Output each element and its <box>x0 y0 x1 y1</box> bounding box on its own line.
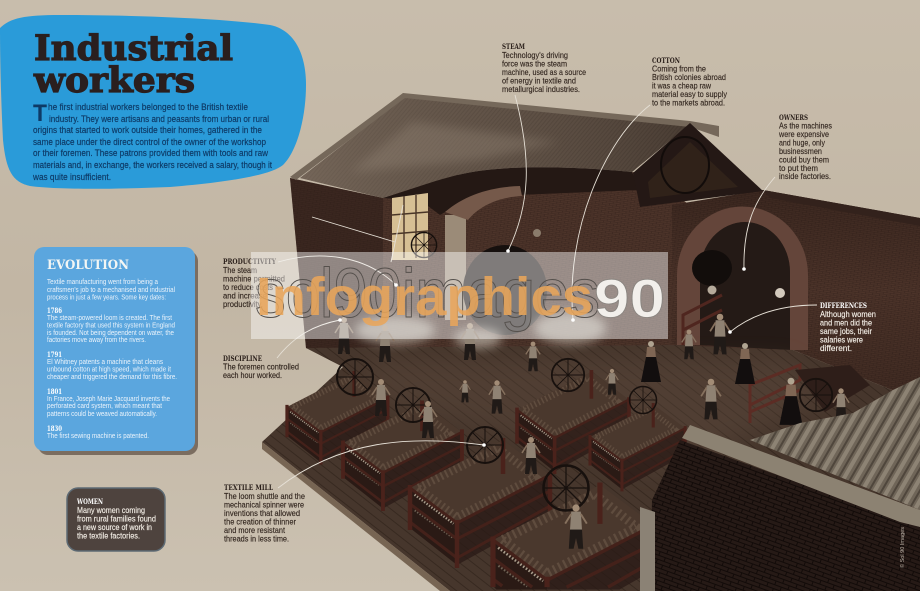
title <box>33 28 233 101</box>
gable <box>633 123 763 207</box>
callout: differences: DIFFERENCES <box>820 301 867 310</box>
illustration: textile mill building <box>262 93 920 591</box>
panel: women: a new source of work in <box>77 522 152 532</box>
callout: productivity <box>223 257 285 309</box>
callout: owners <box>778 113 832 181</box>
callout: textile mill <box>224 483 305 544</box>
callout: owners: OWNERS <box>779 113 808 122</box>
date: 1830: The first sewing machine is patented. <box>47 433 149 440</box>
date: 1830: 1830 <box>47 424 62 433</box>
panel: women: from rural families found <box>77 514 156 524</box>
date: 1791: 1791 <box>47 350 62 359</box>
date: 1786: The steam-powered loom is created. The first <box>47 315 172 322</box>
callout: cotton: COTTON <box>652 56 680 65</box>
leader lines with dots <box>277 95 817 488</box>
evolution intro: Textile manufacturing went from being a <box>47 279 158 286</box>
callout: cotton: to the markets abroad. <box>652 98 725 108</box>
intro panel: blue blob <box>0 15 306 189</box>
callout: owners: businessmen <box>779 146 822 156</box>
lower right corrugated roof <box>750 377 920 510</box>
callout: steam: Technology's driving <box>502 50 568 60</box>
callout: owners: could buy them <box>779 154 829 164</box>
callout: textile mill: the creation of thinner <box>224 516 296 526</box>
main roof <box>300 97 690 198</box>
callout: productivity: PRODUCTIVITY <box>223 257 276 266</box>
callout: discipline: each hour worked. <box>223 370 282 380</box>
lower right brick building <box>650 440 920 591</box>
date: 1801: In France, Joseph Marie Jacquard invents the <box>47 396 170 403</box>
callout: owners: to put them <box>779 163 818 173</box>
right wall with arch <box>672 190 920 392</box>
date: 1786: textile factory that used this system in England <box>47 322 175 330</box>
callout: cotton: material easy to supply <box>652 89 728 99</box>
date: 1786: factories move away from the rivers. <box>47 337 146 344</box>
callout: discipline <box>223 354 299 380</box>
panel: women: the textile factories. <box>77 530 140 540</box>
copyright: © Sol 90 Images <box>899 526 906 568</box>
callout: textile mill: inventions that allowed <box>224 508 300 518</box>
callout: steam: STEAM <box>502 42 525 51</box>
floor <box>262 345 920 591</box>
callout: textile mill: and more resistant <box>224 525 286 535</box>
date: 1791: cheaper and triggered the demand for this fibre. <box>47 374 177 381</box>
date: 1801 <box>47 387 170 418</box>
callout: steam: of energy in textile and <box>502 76 576 86</box>
date: 1801: perforated card system, which meant that <box>47 403 162 410</box>
callout: steam <box>502 42 586 94</box>
arch <box>677 206 808 350</box>
intro text: was quite insufficient. <box>32 172 111 183</box>
date: 1801: patterns could be weaved automatically. <box>47 411 157 418</box>
evolution heading: EVOLUTION <box>47 258 129 273</box>
watermark: 90 <box>594 269 665 329</box>
evolution intro: craftsmen's job to a mechanised and industrial <box>47 287 175 294</box>
callout: productivity: The steam <box>223 265 257 275</box>
title: Industrial <box>34 28 233 69</box>
evolution intro <box>47 279 175 302</box>
date: 1786: is founded. Not being dependent on water, the <box>47 330 174 337</box>
callout: steam: metallurgical industries. <box>502 84 580 94</box>
callout: discipline: DISCIPLINE <box>223 354 262 363</box>
callout: cotton: it was a cheap raw <box>652 80 712 90</box>
intro text: industry. They were artisans and peasants from urban or rural <box>49 114 269 125</box>
callout: textile mill: mechanical spinner were <box>224 500 304 510</box>
window <box>392 193 428 260</box>
evolution intro: process in just a few years. Some key dates: <box>47 294 166 302</box>
callout: steam: force was the steam <box>502 58 567 68</box>
intro text: or their foremen. These patrons provided them with tools and raw <box>33 148 268 159</box>
intro text: T <box>33 100 47 127</box>
callout: steam: machine, used as a source <box>502 67 586 77</box>
date: 1786 <box>47 306 175 344</box>
panel: evolution <box>34 247 198 455</box>
intro text: origins that started to work outside their homes, gathered in the <box>33 125 262 136</box>
panel: women: Many women coming <box>77 505 145 515</box>
callout: differences <box>820 301 876 353</box>
looms <box>287 295 870 589</box>
panel: women <box>67 488 165 551</box>
intro text: same place under the direct control of the owner of the workshop <box>33 137 266 148</box>
stone ledge <box>682 425 920 527</box>
callout: productivity: and increase <box>223 290 267 300</box>
date: 1830 <box>47 424 149 440</box>
callout: cotton: British colonies abroad <box>652 72 726 82</box>
intro text: he first industrial workers belonged to the British textile <box>48 102 248 113</box>
callout: differences: different. <box>820 343 852 353</box>
steam clouds <box>355 312 606 348</box>
back wall <box>340 172 690 350</box>
callout: cotton: Coming from the <box>652 64 706 74</box>
watermark: Infographics <box>256 267 593 327</box>
panel: women: WOMEN <box>76 497 103 506</box>
date: 1786: 1786 <box>47 306 62 315</box>
intro text <box>32 100 272 183</box>
workers <box>335 286 849 549</box>
date: 1791 <box>47 350 177 381</box>
callout: differences: salaries were <box>820 334 863 344</box>
callout: differences: same jobs, their <box>820 326 872 336</box>
callout: owners: As the machines <box>779 120 832 130</box>
callout: discipline: The foremen controlled <box>223 362 299 372</box>
date: 1791: unbound cotton at high speed, which made it <box>47 366 171 374</box>
callout: textile mill: The loom shuttle and the <box>224 491 305 501</box>
callout: textile mill: threads in less time. <box>224 534 289 544</box>
callout: owners: inside factories. <box>779 171 831 181</box>
callout: owners: and huge, only <box>779 138 826 148</box>
callout: productivity: to reduce costs <box>223 282 273 292</box>
callout: differences: Although women <box>820 309 876 319</box>
loom wheels <box>337 359 832 510</box>
left wall <box>290 178 383 365</box>
callout: owners: were expensive <box>778 129 829 139</box>
callout: differences: and men did the <box>820 318 872 328</box>
callout: textile mill: TEXTILE MILL <box>224 483 274 492</box>
date: 1801: 1801 <box>47 387 62 396</box>
callout: cotton <box>652 56 728 108</box>
title: workers <box>33 60 195 101</box>
callout: productivity: machine permitted <box>223 274 285 284</box>
date: 1791: El Whitney patents a machine that cleans <box>47 359 164 366</box>
column and steam machine <box>445 215 466 320</box>
watermark: sol90images <box>255 254 600 332</box>
callout: productivity: productivity. <box>223 299 263 309</box>
intro text: materials and, in exchange, the workers received a salary, though it <box>33 160 272 171</box>
